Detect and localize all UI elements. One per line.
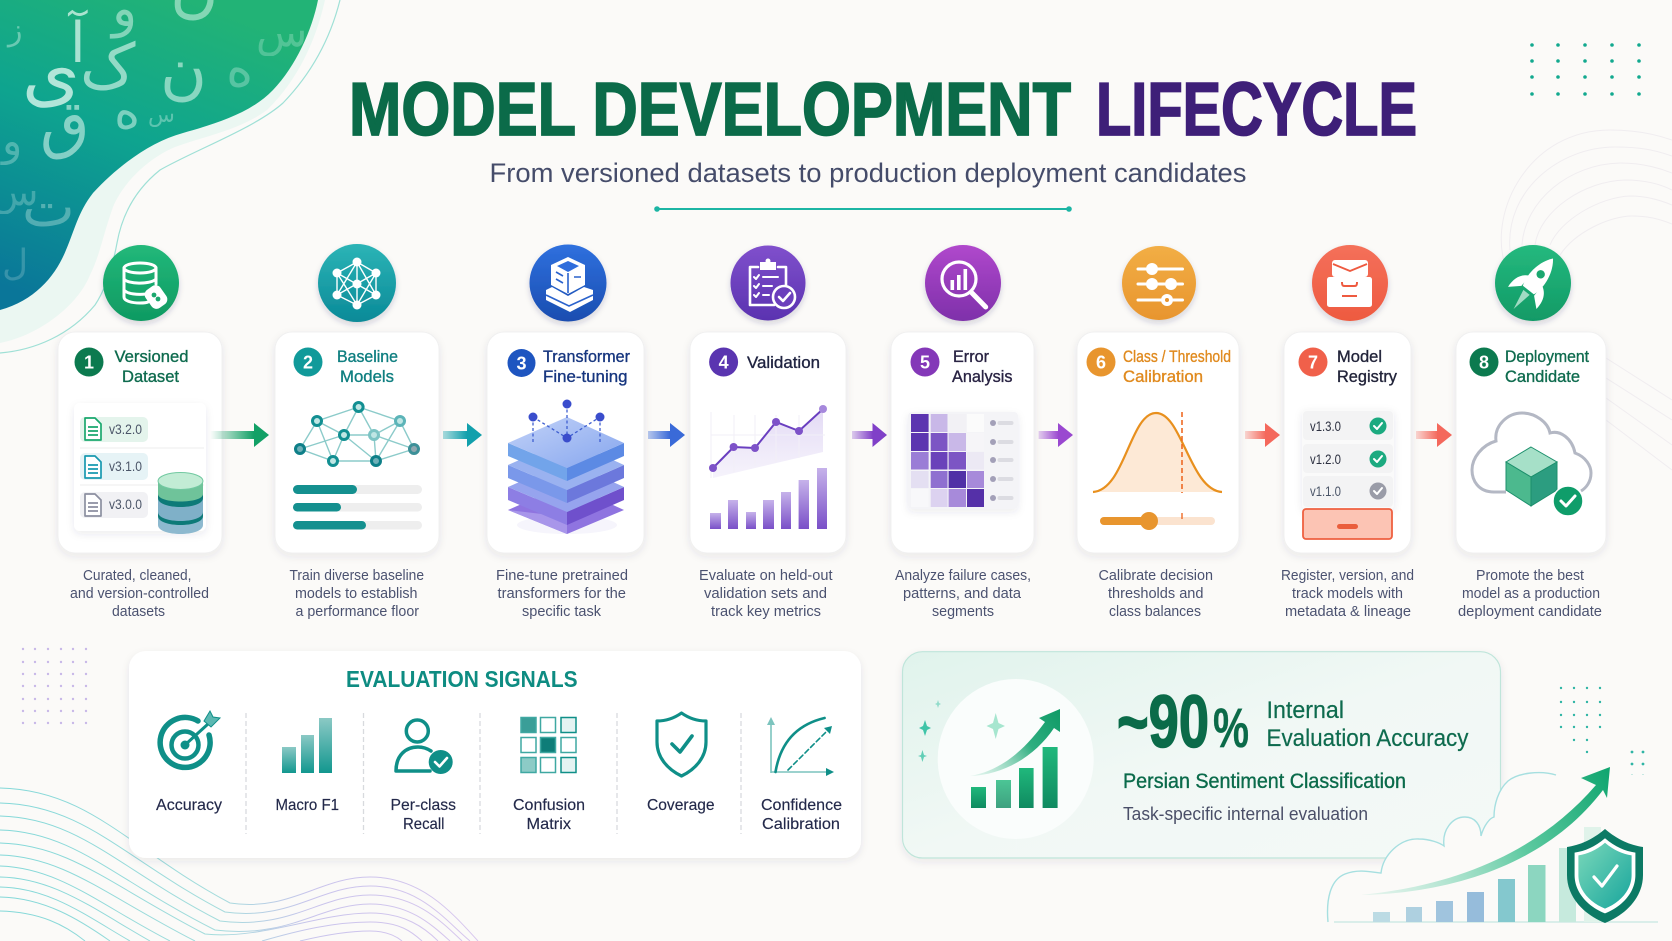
- step title: Error: [953, 347, 989, 366]
- step badge: 6: [1096, 352, 1106, 372]
- arrow 4 to 5: [852, 423, 887, 447]
- signal: accuracy: [156, 711, 222, 814]
- network diagram: [296, 402, 418, 466]
- arrow 5 to 6: [1039, 423, 1073, 447]
- decoration: bottom-left wave lines: [0, 788, 478, 941]
- step title: Registry: [1337, 367, 1397, 386]
- decoration: top-right arcs: [1501, 130, 1672, 470]
- signal: per-class recall: Per-class: [390, 797, 456, 814]
- signal: confusion matrix: Matrix: [526, 816, 571, 833]
- description: model as a production: [1462, 585, 1600, 602]
- decoration: bottom-right dot grid: [1560, 687, 1644, 824]
- step 7: model registry: [1281, 245, 1414, 620]
- description: [1458, 567, 1602, 620]
- decoration: top-left calligraphy blob: س: [148, 103, 175, 128]
- step 5: error analysis: [891, 245, 1034, 620]
- step title: Fine-tuning: [543, 367, 628, 386]
- description: Analyze failure cases,: [895, 567, 1031, 584]
- decoration: top-left calligraphy blob: [0, 0, 340, 353]
- card: [275, 332, 439, 553]
- description: Calibrate decision: [1098, 567, 1213, 584]
- arrow 2 to 3: [443, 423, 482, 447]
- description: and version-controlled: [70, 585, 209, 602]
- card: [58, 332, 222, 553]
- confusion heatmap: [908, 412, 1018, 509]
- description: metadata & lineage: [1285, 603, 1411, 620]
- description: segments: [932, 603, 994, 620]
- step title: [952, 347, 1012, 386]
- card: [1456, 332, 1606, 553]
- step badge: 4: [719, 352, 729, 372]
- step badge: [508, 349, 536, 377]
- step badge: [74, 348, 104, 376]
- icon: magnifier chart: [925, 245, 1001, 321]
- arrow 3 to 4: [648, 423, 685, 447]
- accuracy figure: %: [1213, 696, 1249, 759]
- step title: Calibration: [1123, 367, 1203, 386]
- decoration: top-left calligraphy blob: ز: [6, 13, 22, 48]
- task name: Persian Sentiment Classification: [1123, 770, 1406, 793]
- card: [690, 332, 846, 553]
- arrow 6 to 7: [1245, 423, 1280, 447]
- signal: confidence calibration: [761, 717, 842, 833]
- description: track key metrics: [711, 603, 821, 620]
- decoration: top-left calligraphy blob: ی: [22, 30, 80, 116]
- description: Curated, cleaned,: [83, 567, 192, 584]
- description: models to establish: [295, 585, 418, 602]
- accuracy label: Internal: [1266, 697, 1344, 724]
- description: Promote the best: [1476, 567, 1585, 584]
- subtitle: From versioned datasets to production deployment candidates: [490, 158, 1246, 188]
- decoration: top-left calligraphy blob: ک: [80, 30, 136, 103]
- version registry list: v1.1.0: [1310, 484, 1341, 499]
- card: [487, 332, 644, 553]
- version list panel: v3.0.0: [109, 497, 142, 512]
- step title: Validation: [747, 353, 820, 372]
- decoration: top-right dot grid: [1530, 43, 1641, 96]
- icon: sparkles: [918, 700, 941, 762]
- arrow 1 to 2: [210, 423, 269, 447]
- card: [1077, 332, 1239, 553]
- decoration: top-left calligraphy blob: ت: [22, 175, 75, 240]
- step title: Versioned: [114, 347, 188, 366]
- description: Train diverse baseline: [290, 567, 424, 584]
- step badge: [294, 348, 322, 376]
- step title: [1505, 347, 1589, 386]
- description: [895, 567, 1031, 620]
- decoration: top-left calligraphy blob: ق: [40, 88, 90, 162]
- signal: per-class recall: Recall: [403, 816, 444, 833]
- signal: coverage: Coverage: [647, 797, 715, 814]
- step title: [543, 347, 630, 386]
- step title: Deployment: [1505, 347, 1589, 366]
- icon: growth chart in circle: [938, 679, 1094, 839]
- step badge: 3: [516, 354, 527, 374]
- task note: Task-specific internal evaluation: [1123, 804, 1368, 824]
- step badge: 1: [84, 352, 94, 372]
- version list panel: v3.1.0: [109, 459, 142, 474]
- step 4: validation: [690, 246, 846, 620]
- decoration: top-left calligraphy blob: ل: [2, 243, 28, 284]
- title divider: [654, 206, 1072, 212]
- step badge: 7: [1308, 352, 1318, 372]
- distribution curve: [1093, 412, 1222, 493]
- database cylinder: [158, 472, 203, 534]
- decoration: top-left calligraphy blob: و: [0, 116, 22, 165]
- signal: confidence calibration: Calibration: [762, 816, 840, 833]
- step title: Class / Threshold: [1123, 347, 1231, 366]
- progress bars: [293, 485, 422, 530]
- description: Register, version, and: [1281, 567, 1414, 584]
- signal: macro f1: [276, 718, 339, 814]
- decoration: top-left calligraphy blob: س: [256, 7, 307, 56]
- description: specific task: [522, 603, 601, 620]
- description: [290, 567, 424, 620]
- step title: Models: [340, 367, 394, 386]
- step title: Analysis: [952, 367, 1012, 386]
- version list panel: v3.2.0: [109, 422, 142, 437]
- illustration: cloud, growth bars, arrow and shield: [1328, 767, 1660, 923]
- panel: evaluation signals: [129, 651, 861, 858]
- version registry list: [1302, 409, 1394, 509]
- signal: coverage: [647, 713, 715, 814]
- description: deployment candidate: [1458, 603, 1602, 620]
- icon: clipboard check: [730, 246, 806, 320]
- step badge: [709, 348, 738, 376]
- step title: [114, 347, 188, 386]
- cloud with cube: [1472, 413, 1591, 516]
- step badge: [1298, 348, 1328, 376]
- step title: Baseline: [337, 347, 398, 366]
- step 1: versioned dataset: [58, 245, 222, 620]
- layered stack: [508, 400, 624, 534]
- decoration: top-left calligraphy blob: آ: [67, 9, 88, 76]
- open drawer: [1303, 509, 1392, 539]
- step badge: [1470, 348, 1498, 376]
- description: [1098, 567, 1213, 620]
- panel heading: EVALUATION SIGNALS: [346, 666, 578, 692]
- decoration: top-left calligraphy blob: ن: [160, 34, 207, 108]
- accuracy label: Evaluation Accuracy: [1266, 725, 1468, 752]
- icon: stacked cube: [530, 244, 606, 322]
- description: Evaluate on held-out: [699, 567, 833, 584]
- panel: accuracy callout: [902, 652, 1500, 858]
- description: patterns, and data: [903, 585, 1022, 602]
- icon: database with tag: [103, 245, 179, 321]
- step title: Model: [1337, 347, 1382, 366]
- step title: [337, 347, 398, 386]
- signal: macro f1: Macro F1: [276, 797, 339, 814]
- step badge: 5: [920, 352, 930, 372]
- description: validation sets and: [704, 585, 827, 602]
- step title: [1123, 347, 1231, 386]
- description: a performance floor: [296, 603, 419, 620]
- step 3: transformer fine-tuning: [487, 244, 644, 620]
- description: [1281, 567, 1414, 620]
- icon: sliders: [1122, 246, 1196, 320]
- accuracy label: [1266, 697, 1468, 752]
- description: [70, 567, 209, 620]
- description: Fine-tune pretrained: [496, 567, 628, 584]
- step title: [1337, 347, 1397, 386]
- description: [699, 567, 833, 620]
- icon: rocket: [1495, 245, 1571, 321]
- signal: per-class recall: [390, 720, 456, 833]
- decoration: top-left calligraphy blob: ه: [114, 82, 140, 140]
- title: MODEL DEVELOPMENT: [349, 67, 1071, 151]
- step 8: deployment candidate: [1456, 245, 1606, 620]
- version registry list: v1.2.0: [1310, 452, 1341, 467]
- arrow 7 to 8: [1416, 423, 1452, 447]
- step title: Transformer: [543, 347, 630, 366]
- decoration: bottom-left dot grid: [22, 648, 87, 724]
- step 6: class threshold calibration: [1077, 246, 1239, 620]
- threshold slider: [1100, 512, 1215, 530]
- signal: confusion matrix: Confusion: [513, 797, 585, 814]
- signal: accuracy: Accuracy: [156, 797, 222, 814]
- icon: neural network: [318, 244, 396, 322]
- card: [891, 332, 1034, 553]
- card: [1284, 332, 1411, 553]
- step badge: [910, 348, 940, 376]
- title: LIFECYCLE: [1096, 67, 1417, 151]
- signal: confusion matrix: [513, 718, 585, 833]
- description: track models with: [1292, 585, 1403, 602]
- signal: confidence calibration: Confidence: [761, 797, 842, 814]
- step title: Candidate: [1505, 367, 1580, 386]
- step badge: 2: [303, 352, 313, 372]
- step badge: 8: [1479, 352, 1489, 372]
- accuracy figure: ~90: [1117, 680, 1209, 763]
- step 2: baseline models: [275, 244, 439, 620]
- description: transformers for the: [498, 585, 626, 602]
- icon: filing drawer: [1312, 245, 1388, 321]
- decoration: top-left calligraphy blob: ه: [226, 39, 253, 99]
- line chart: [709, 405, 827, 478]
- description: thresholds and: [1108, 585, 1204, 602]
- version list panel: [74, 403, 206, 531]
- description: class balances: [1109, 603, 1201, 620]
- description: [496, 567, 628, 620]
- description: datasets: [112, 603, 165, 620]
- step badge: [1086, 348, 1116, 376]
- bar chart: [710, 468, 827, 529]
- version registry list: v1.3.0: [1310, 419, 1341, 434]
- step title: Dataset: [122, 367, 179, 386]
